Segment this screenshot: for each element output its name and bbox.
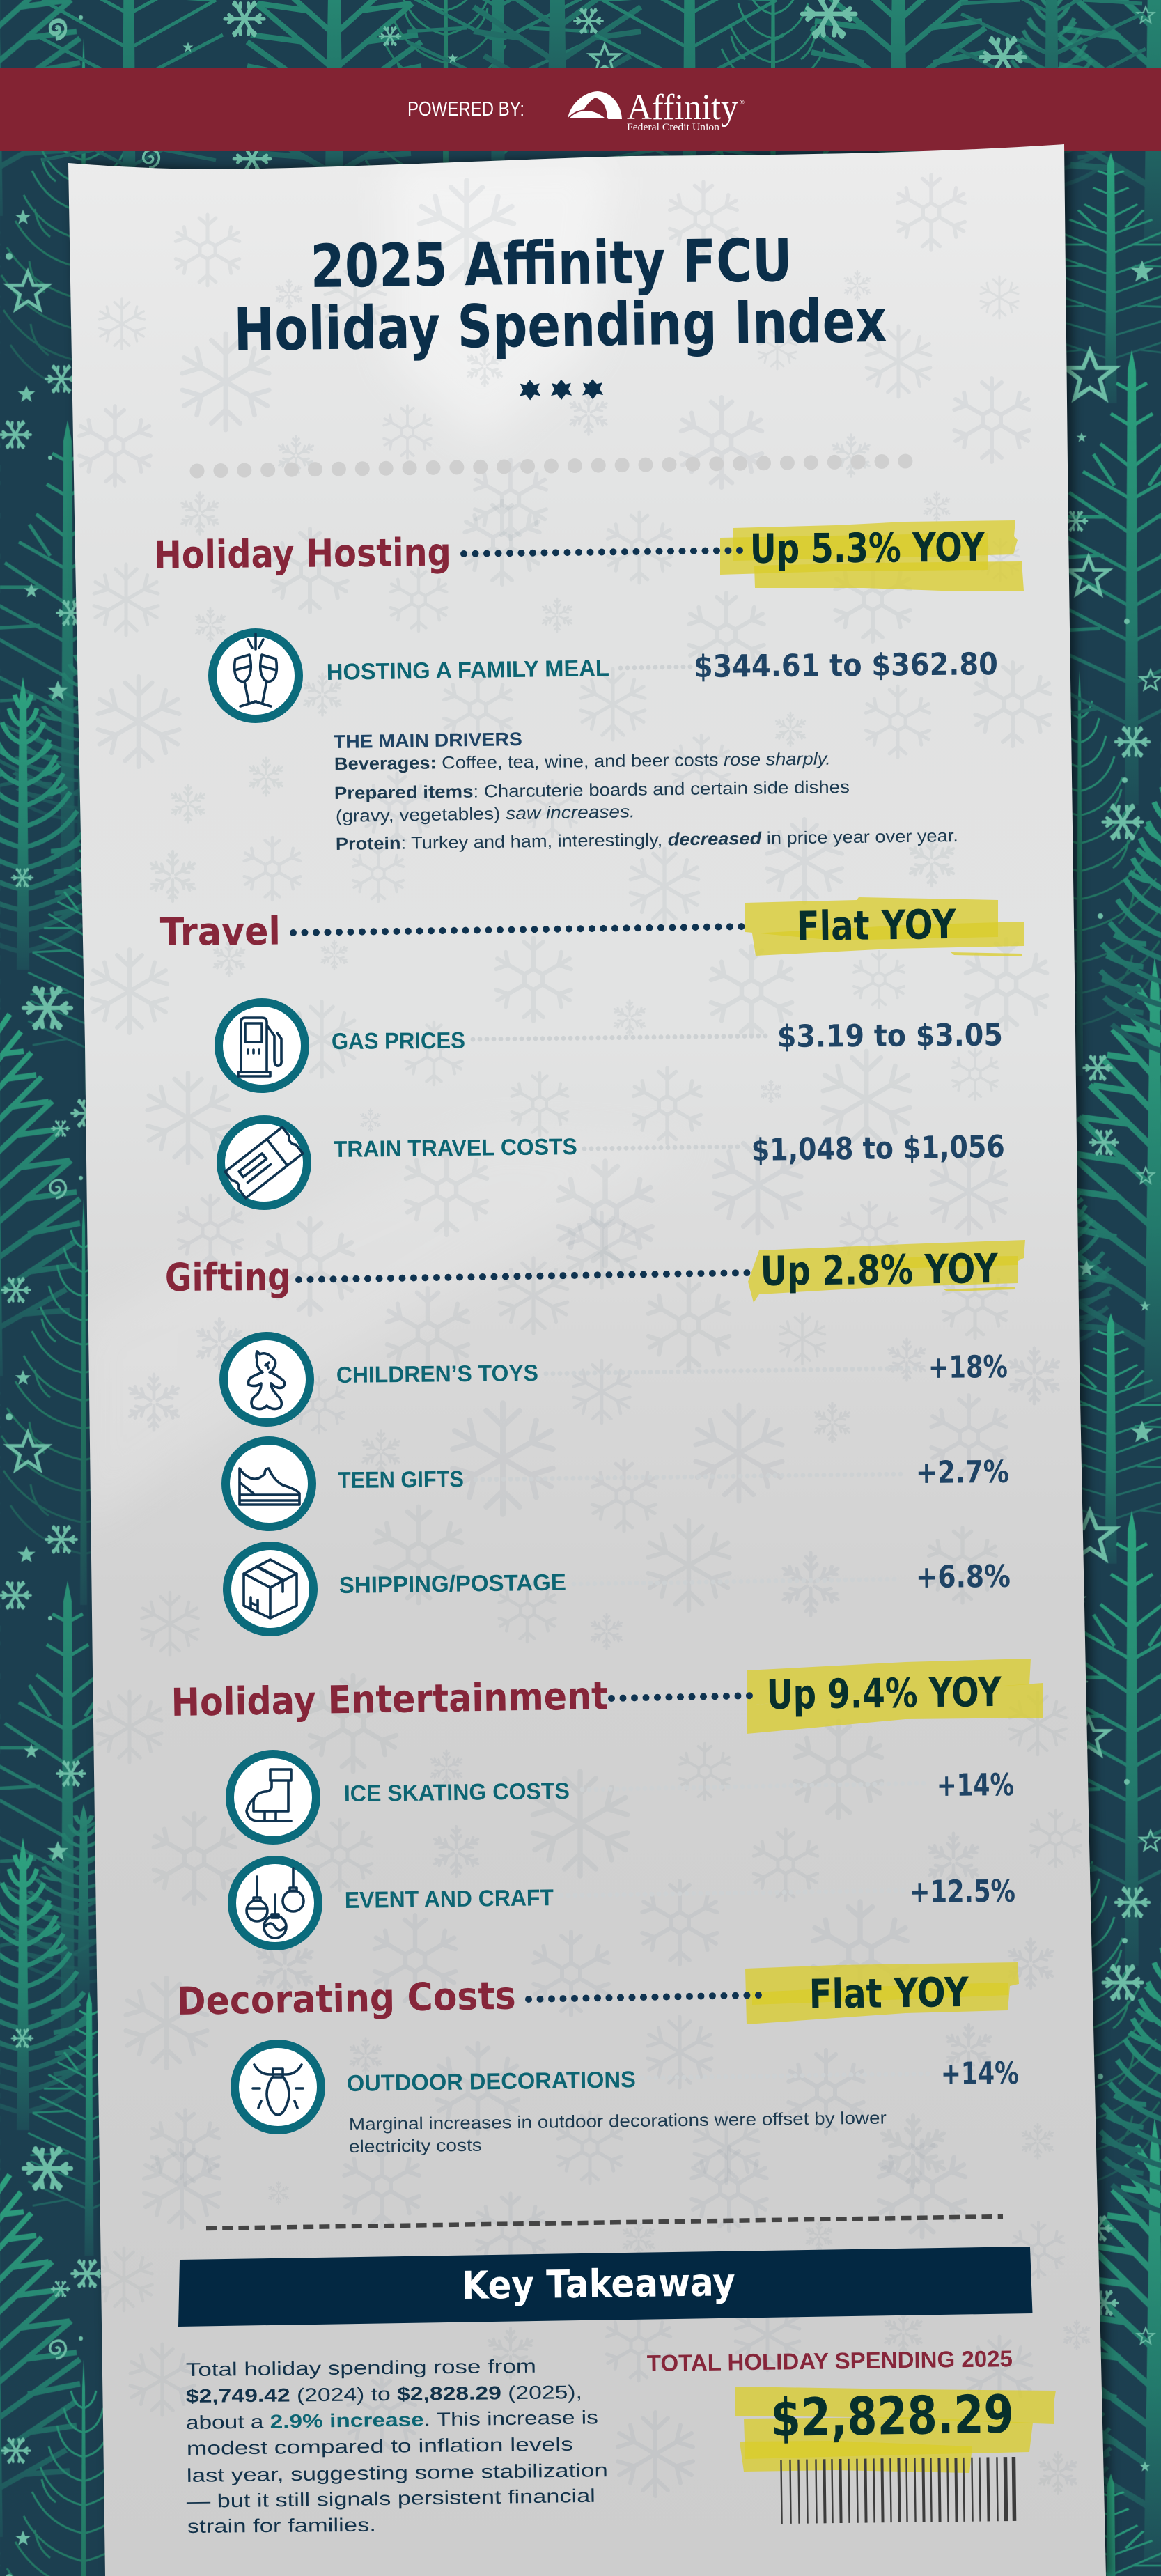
header band [0,68,1161,151]
icon: teddy bear [249,1351,285,1409]
text: outdoor note: electricity costs [349,2136,482,2157]
section: holiday entertainment [171,1668,1015,1946]
row: hosting a family meal: $344.61 to $362.80 [694,646,998,685]
takeaway paragraph: — but it still signals persistent financial [187,2485,595,2512]
icon: light bulb [253,2065,303,2115]
text block: the main drivers [334,729,958,854]
row: gas prices: $3.19 to $3.05 [777,1017,1003,1055]
takeaway paragraph: strain for families. [187,2515,376,2537]
powered by label: POWERED BY: [407,98,524,121]
icon: train ticket [225,1127,303,1198]
section: holiday hosting: Up 5.3% YOY [750,524,985,573]
icon: champagne flutes [235,634,276,706]
total holiday spending callout: TOTAL HOLIDAY SPENDING 2025 [647,2345,1013,2376]
highlight: decorating [745,1962,1019,2024]
takeaway paragraph: modest compared to inflation levels [187,2434,573,2459]
Affinity logo [568,88,745,133]
section: decorating costs: Flat YOY [809,1969,969,2018]
text: outdoor note: Marginal increases in outdoor decorations were offset by lower [349,2109,887,2134]
section: travel [160,901,1005,1206]
section: holiday entertainment: Up 9.4% YOY [766,1668,1002,1718]
row: event and craft: +12.5% [910,1874,1015,1910]
total holiday spending callout: $2,828.29 [770,2384,1014,2449]
section: travel: Flat YOY [796,901,957,950]
highlight: up 5.3 percent [720,520,1024,591]
row: gas prices [219,1002,1003,1089]
row: train travel costs: $1,048 to $1,056 [751,1129,1005,1168]
takeaway paragraph: last year, suggesting some stabilization [187,2460,608,2486]
text block: the main drivers: Prepared items : Charcuterie boards and certain side dishes [334,777,850,803]
row: hosting a family meal [212,633,998,719]
Affinity logo: Affinity [627,88,738,127]
row: ice skating costs [230,1754,1014,1840]
row: teen gifts: +2.7% [916,1454,1009,1491]
section: decorating costs [176,1969,1019,2157]
title stars [520,379,603,401]
icon: ice skate [247,1769,291,1821]
title: 2025 Affinity FCU [310,226,793,302]
row: teen gifts [226,1441,1009,1527]
section: gifting [165,1245,1011,1632]
row: children's toys: +18% [928,1349,1008,1386]
row: teen gifts: TEEN GIFTS [338,1466,464,1493]
icon: ornaments [247,1868,304,1938]
icon: gas pump [238,1018,281,1076]
text block: the main drivers: Protein : Turkey and ham, interestingly, decreased in price year over year. [336,826,958,854]
text: outdoor note [349,2109,887,2157]
row: children's toys [224,1336,1008,1422]
key takeaway banner [178,2247,1032,2327]
barcode [781,2457,1015,2524]
takeaway paragraph: about a 2.9% increase . This increase is [186,2407,598,2433]
Affinity logo: ® [740,99,745,106]
total holiday spending callout [647,2345,1056,2524]
takeaway paragraph: $2,749.42 (2024) to $2,828.29 (2025), [186,2382,582,2407]
section: holiday hosting [153,524,998,854]
row: shipping and postage: SHIPPING/POSTAGE [339,1569,566,1598]
row: shipping and postage: +6.8% [916,1559,1011,1595]
text block: the main drivers: Beverages: Coffee, tea, wine, and beer costs rose sharply. [334,750,831,774]
takeaway paragraph [186,2356,608,2537]
row: outdoor decorations: OUTDOOR DECORATIONS [347,2066,636,2096]
takeaway paragraph: Total holiday spending rose from [186,2356,536,2380]
highlight: travel flat [745,897,1024,956]
row: train travel costs: TRAIN TRAVEL COSTS [334,1133,577,1162]
section: gifting: Up 2.8% YOY [760,1245,999,1295]
section: decorating costs: Decorating Costs [176,1973,516,2024]
text block: the main drivers: (gravy, vegetables) saw increases. [336,802,635,826]
dashed divider [206,2217,1003,2228]
title [233,226,887,401]
row: event and craft: EVENT AND CRAFT [345,1884,554,1913]
row: children's toys: CHILDREN’S TOYS [336,1360,538,1388]
highlight: total [735,2387,1056,2473]
row: outdoor decorations: +14% [941,2056,1019,2092]
row: outdoor decorations [235,2044,1019,2130]
section: travel: Travel [160,908,281,954]
row: train travel costs [221,1119,1005,1206]
section: gifting: Gifting [165,1255,291,1300]
Affinity logo: Federal Credit Union [627,122,720,133]
key takeaway banner: Key Takeaway [461,2260,735,2308]
row: ice skating costs: +14% [937,1767,1014,1803]
section: holiday entertainment: Holiday Entertainment [171,1673,608,1725]
icon: sneaker [240,1468,299,1505]
row: event and craft [232,1860,1015,1946]
row: ice skating costs: ICE SKATING COSTS [344,1778,570,1806]
text block: the main drivers: THE MAIN DRIVERS [334,729,522,752]
row: gas prices: GAS PRICES [332,1027,465,1054]
section: holiday hosting: Holiday Hosting [153,530,451,577]
row: shipping and postage [227,1546,1011,1632]
highlight: gifting [748,1240,1025,1303]
title: Holiday Spending Index [233,287,887,365]
perforation dots [197,461,906,471]
icon: shipping box [244,1560,297,1618]
row: hosting a family meal: HOSTING A FAMILY MEAL [327,655,609,685]
highlight: entertainment [747,1659,1043,1734]
